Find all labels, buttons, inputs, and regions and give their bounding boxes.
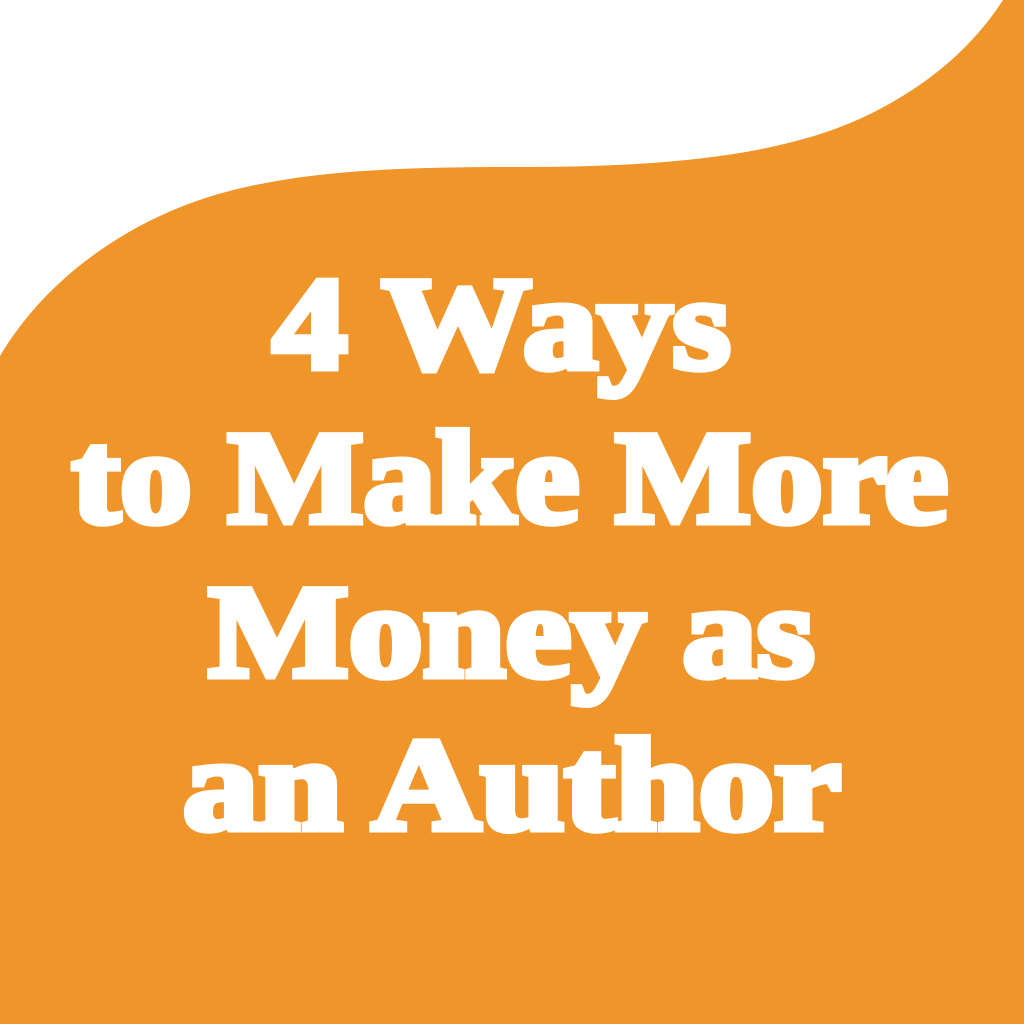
title: 4 Ways xyxy=(272,250,730,397)
title: to Make More xyxy=(72,404,948,551)
title xyxy=(72,250,948,858)
title: Money as xyxy=(208,558,814,705)
title: an Author xyxy=(183,711,841,858)
